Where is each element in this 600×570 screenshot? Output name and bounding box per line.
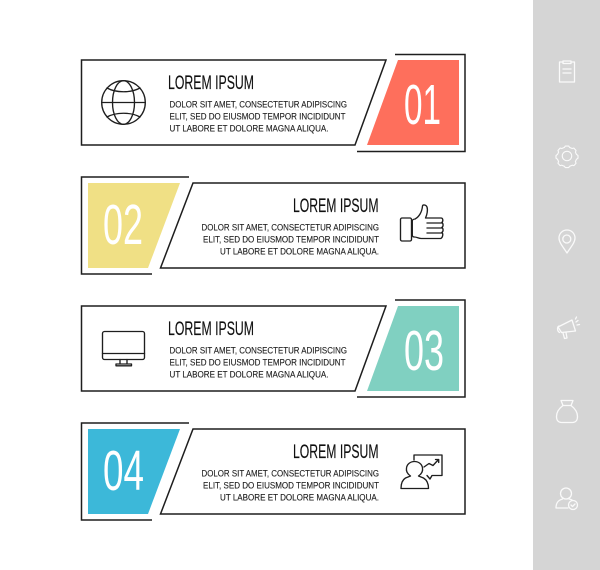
- icon: person with chart: [401, 455, 442, 488]
- panel 4 outline: [160, 429, 465, 514]
- heading: LOREM IPSUM: [293, 195, 378, 217]
- number badge 02: 02: [103, 193, 143, 257]
- icon: clipboard: [560, 61, 574, 82]
- number badge 04: 04: [103, 439, 144, 503]
- body text: ELIT, SED DO EIUSMOD TEMPOR INCIDIDUNT: [203, 481, 379, 491]
- body text: UT LABORE ET DOLORE MAGNA ALIQUA.: [220, 247, 379, 257]
- body text: [202, 223, 379, 257]
- body text: DOLOR SIT AMET, CONSECTETUR ADIPISCING: [170, 100, 347, 110]
- heading: LOREM IPSUM: [168, 72, 254, 94]
- icon: megaphone: [558, 317, 580, 338]
- number badge 02: [82, 177, 189, 274]
- panel 3: [82, 300, 465, 397]
- number badge 03: [357, 300, 465, 397]
- body text: [170, 100, 347, 134]
- number badge 01: 01: [404, 73, 441, 137]
- number badge 01: [357, 54, 465, 152]
- icon: money bag: [556, 400, 578, 422]
- panel 1: [82, 54, 465, 152]
- body text: DOLOR SIT AMET, CONSECTETUR ADIPISCING: [202, 223, 379, 233]
- icon: user check: [556, 488, 578, 510]
- sidebar: [533, 0, 600, 570]
- panel 2: [82, 177, 465, 274]
- number badge 04: [82, 423, 189, 520]
- body text: UT LABORE ET DOLORE MAGNA ALIQUA.: [170, 370, 328, 380]
- body text: ELIT, SED DO EIUSMOD TEMPOR INCIDIDUNT: [170, 112, 346, 122]
- panel 3 outline: [82, 306, 386, 391]
- body text: [170, 346, 347, 380]
- icon: globe: [102, 81, 145, 124]
- panel 4: [82, 423, 465, 520]
- heading: LOREM IPSUM: [293, 441, 378, 463]
- body text: DOLOR SIT AMET, CONSECTETUR ADIPISCING: [170, 346, 347, 356]
- icon: gear: [556, 146, 578, 168]
- body text: DOLOR SIT AMET, CONSECTETUR ADIPISCING: [202, 469, 379, 479]
- icon: thumbs up: [400, 205, 443, 241]
- body text: UT LABORE ET DOLORE MAGNA ALIQUA.: [170, 124, 328, 134]
- icon: monitor: [102, 332, 144, 366]
- panel 1 outline: [82, 60, 386, 145]
- heading: LOREM IPSUM: [168, 318, 254, 340]
- panel 2 outline: [160, 183, 465, 268]
- body text: UT LABORE ET DOLORE MAGNA ALIQUA.: [220, 493, 379, 503]
- number badge 03: 03: [404, 319, 444, 383]
- body text: [202, 469, 379, 503]
- body text: ELIT, SED DO EIUSMOD TEMPOR INCIDIDUNT: [203, 235, 379, 245]
- icon: location pin: [559, 230, 575, 253]
- body text: ELIT, SED DO EIUSMOD TEMPOR INCIDIDUNT: [170, 358, 346, 368]
